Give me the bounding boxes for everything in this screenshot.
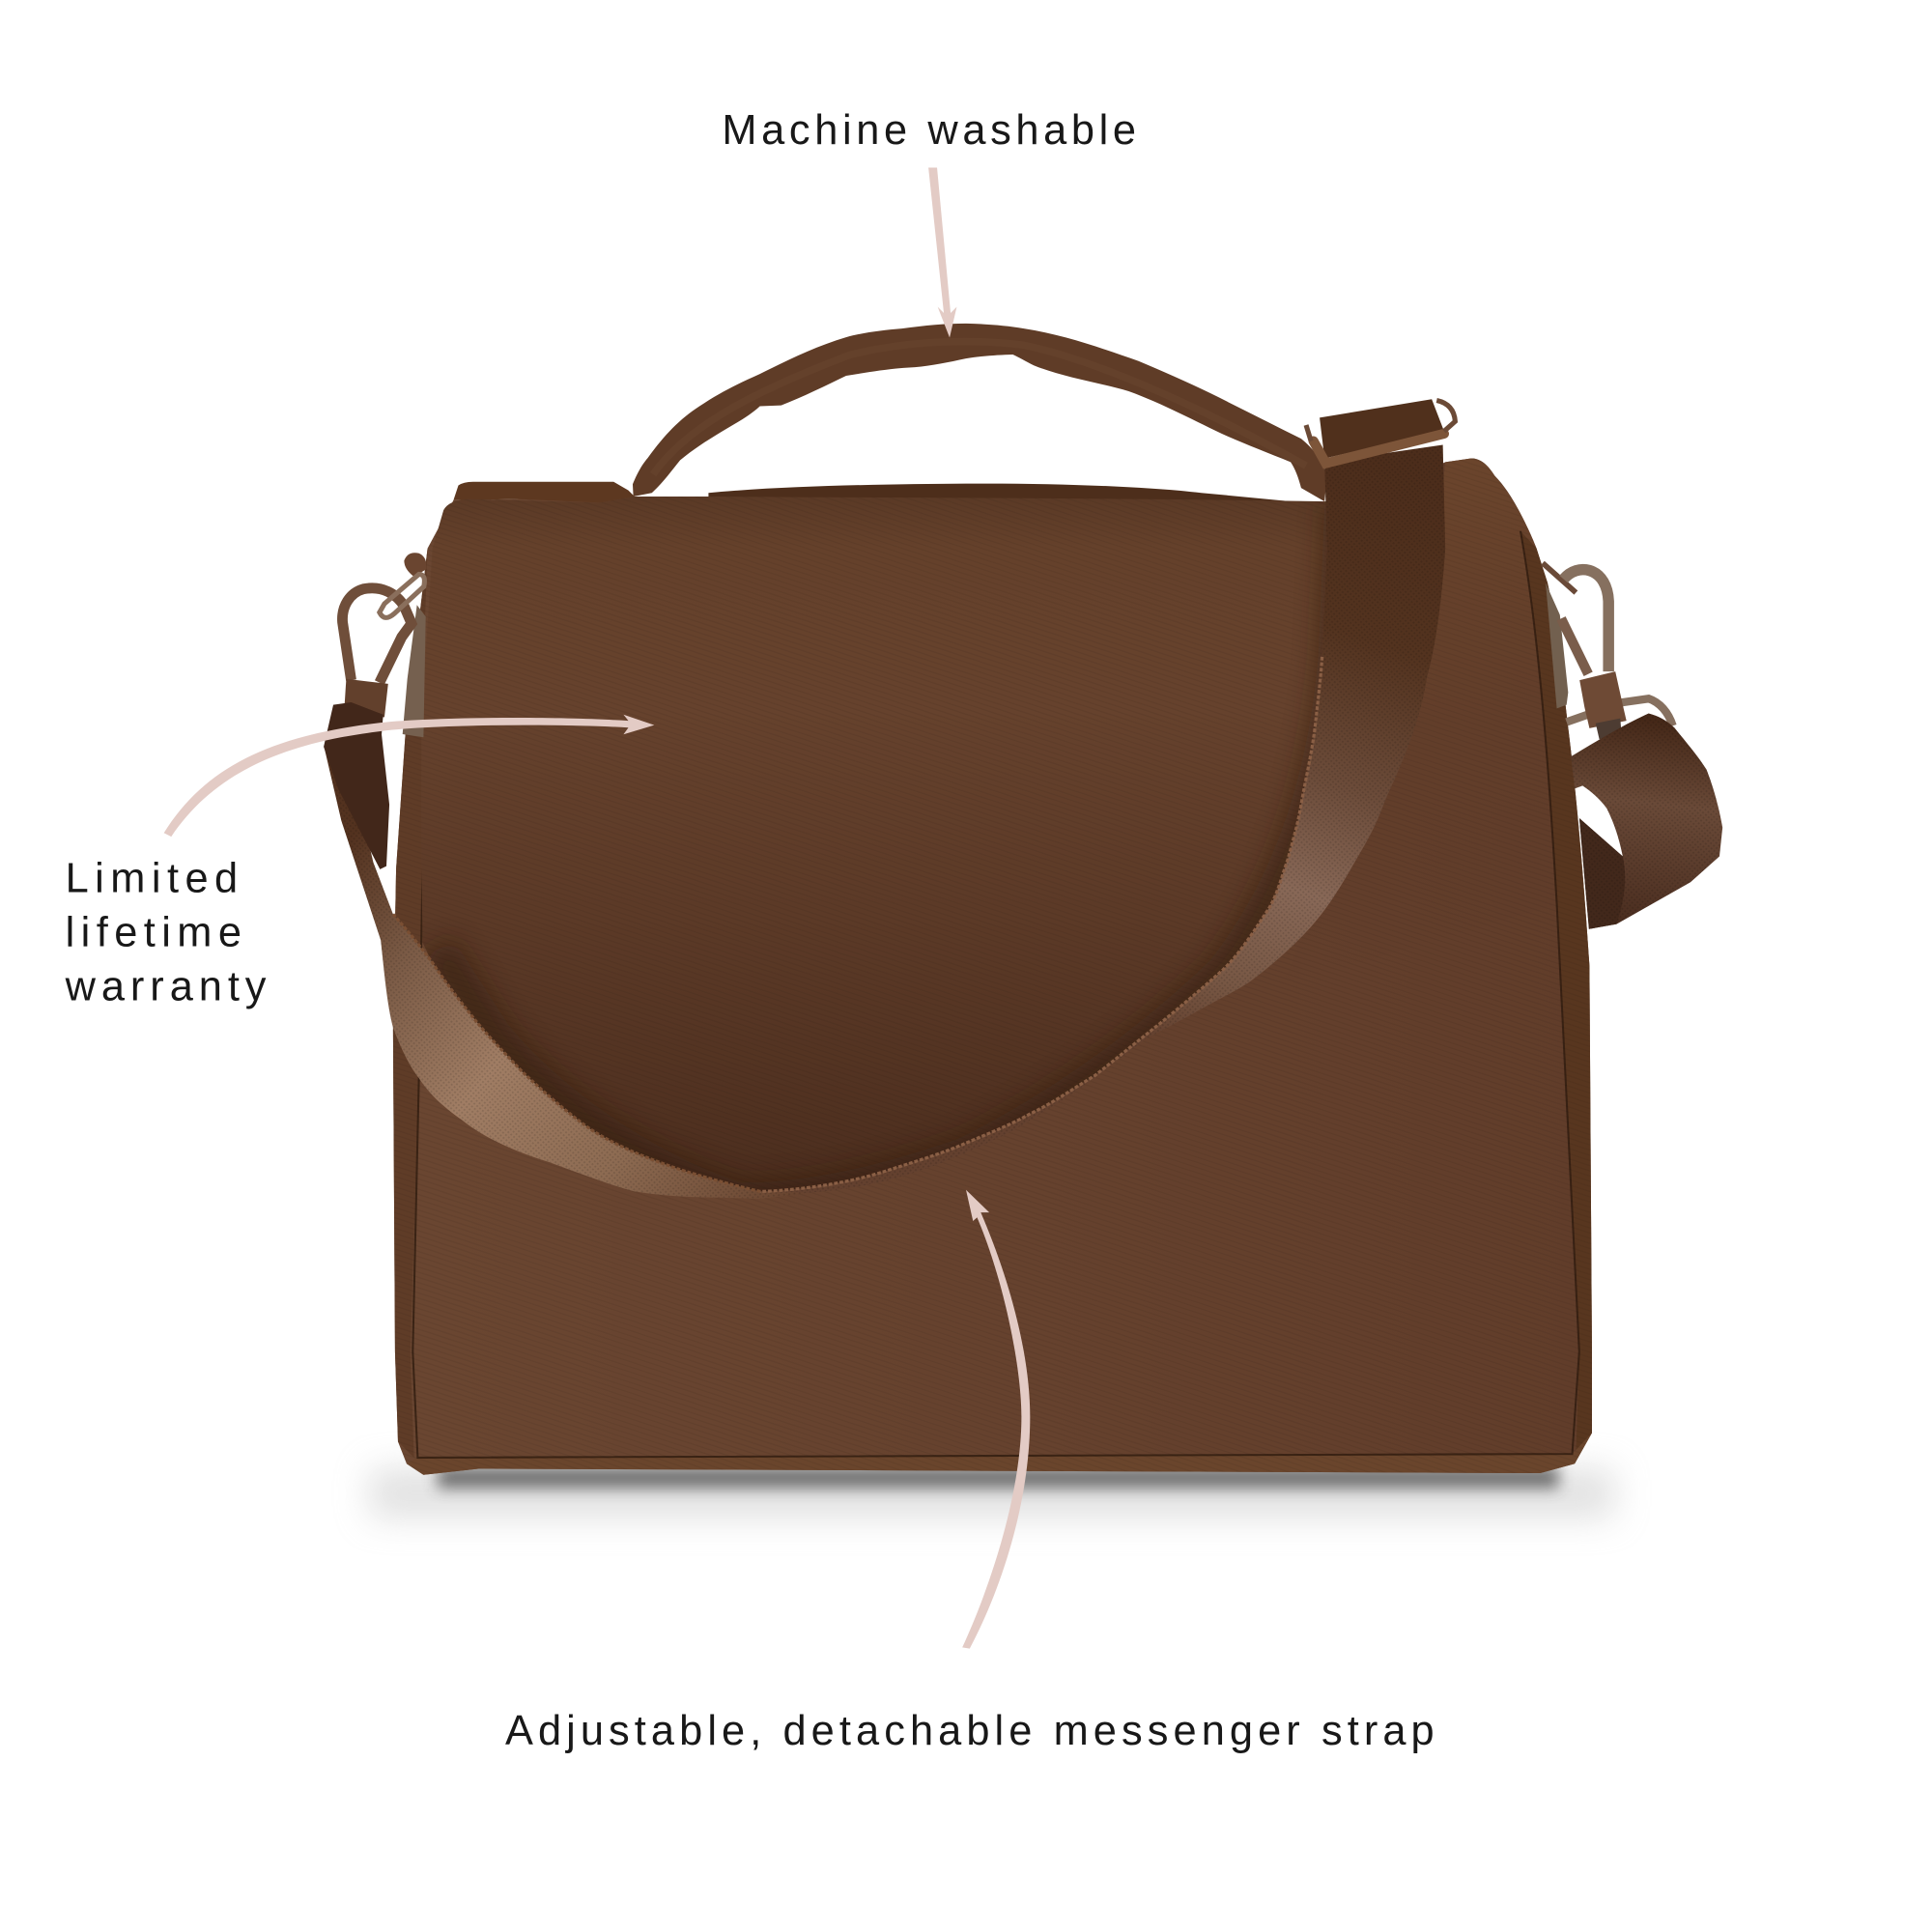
leather tab [324, 702, 389, 869]
body outer shape [393, 458, 1592, 1475]
left hook spine [342, 588, 412, 683]
label: machine washable: Machine washable [722, 107, 1136, 154]
right d-ring [1567, 698, 1673, 725]
bottom trim [407, 1433, 1592, 1475]
body upper right light [1282, 458, 1556, 985]
right hook gate [1561, 618, 1588, 674]
body weave [393, 458, 1592, 1475]
top left trim [453, 482, 635, 502]
left ring [380, 574, 424, 617]
left nub [404, 553, 426, 577]
arrow: limited lifetime warranty [164, 715, 654, 837]
seams [412, 531, 1579, 1458]
ground shadow [370, 1466, 1614, 1518]
right hook spine [1564, 570, 1608, 671]
left swivel [344, 679, 388, 717]
right swivel [1579, 671, 1627, 728]
right side panel [1520, 531, 1592, 1455]
right clasp hardware [1543, 563, 1673, 739]
right side webbing [1546, 582, 1568, 708]
arrow: adjustable strap [962, 1190, 1030, 1649]
right connector [1543, 563, 1576, 593]
main strap [760, 444, 1445, 1193]
flap inner shadow along strap [438, 505, 1343, 1202]
left side webbing [403, 605, 426, 737]
left clasp hardware [342, 553, 426, 737]
bag body [393, 458, 1592, 1475]
label: limited lifetime warranty: lifetime [66, 910, 242, 956]
strap slider buckle [1306, 399, 1455, 464]
handle [633, 324, 1327, 501]
left strap [324, 747, 807, 1199]
label: limited lifetime warranty: warranty [65, 964, 267, 1010]
label: limited lifetime warranty [65, 855, 267, 1010]
bag rear trim strip [708, 484, 1331, 518]
left side panel [393, 549, 428, 1458]
label: adjustable detachable strap: Adjustable, detachable messenger strap [505, 1708, 1435, 1754]
label: limited lifetime warranty: Limited [66, 855, 238, 901]
arrow: machine washable [928, 167, 956, 337]
right strap loop [1571, 714, 1722, 929]
flap [421, 497, 1343, 1202]
